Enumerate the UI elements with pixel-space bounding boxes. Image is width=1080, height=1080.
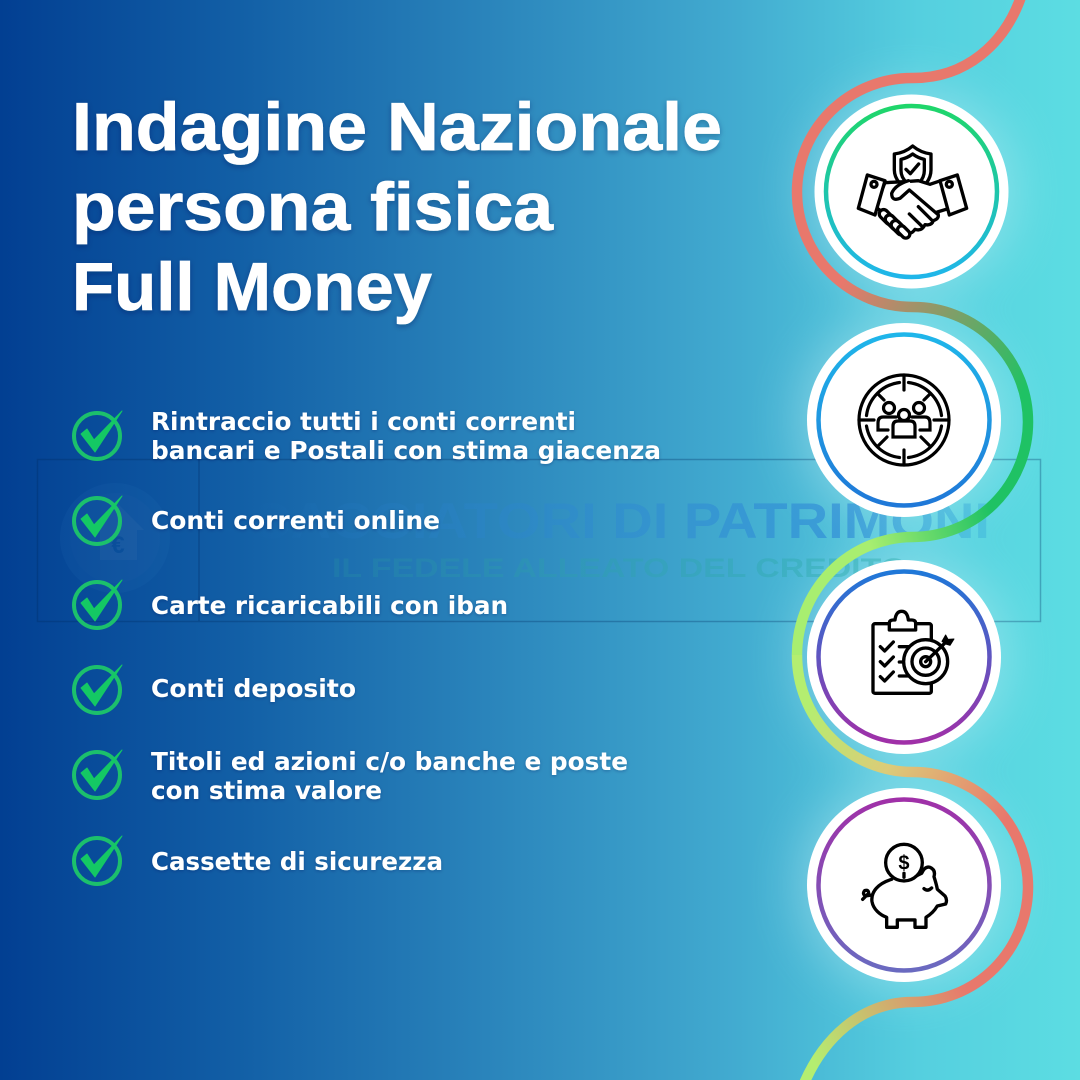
item: conti correnti [74, 407, 661, 465]
title: Indagine Nazionale [72, 89, 722, 165]
item: titoli ed azioni: con stima valore [151, 776, 382, 805]
item: conti online: Conti correnti online [151, 506, 440, 535]
circle: handshake with shield [814, 94, 1008, 288]
item: conti online [74, 496, 440, 544]
watermark emblem: € [111, 532, 125, 559]
item: carte ricaricabili [74, 580, 508, 628]
watermark logo banner [38, 459, 1040, 622]
icon: people in crosshair [859, 375, 949, 465]
circle: clipboard with target [807, 560, 1001, 754]
checklist [74, 407, 661, 884]
watermark emblem [65, 488, 165, 588]
watermark name: CACCIATORI DI PATRIMONI [250, 493, 990, 549]
item: titoli ed azioni: Titoli ed azioni c/o banche e poste [151, 747, 628, 776]
item: cassette di sicurezza: Cassette di sicurezza [151, 847, 443, 876]
item: conti deposito [74, 665, 356, 713]
item: titoli ed azioni [74, 747, 628, 805]
circle: target with people [807, 323, 1001, 517]
item: conti correnti: Rintraccio tutti i conti correnti [151, 407, 576, 436]
item: conti correnti: bancari e Postali con stima giacenza [151, 436, 661, 465]
title: persona fisica [72, 169, 554, 245]
icon: piggy bank with coin [863, 844, 947, 927]
title [72, 89, 722, 325]
item: carte ricaricabili: Carte ricaricabili con iban [151, 591, 508, 620]
winding gradient ribbon [797, 0, 1028, 1080]
item: cassette di sicurezza [74, 836, 443, 884]
glow behind circles [804, 91, 1011, 985]
icon: handshake [858, 146, 967, 240]
title: Full Money [72, 249, 432, 325]
item: conti deposito: Conti deposito [151, 674, 356, 703]
icon: piggy bank with coin: $ [898, 852, 910, 874]
icon: clipboard and dart target [873, 611, 954, 693]
watermark tagline: IL FEDELE ALLEATO DEL CREDITO [332, 553, 907, 583]
circle: piggy bank [807, 788, 1001, 982]
